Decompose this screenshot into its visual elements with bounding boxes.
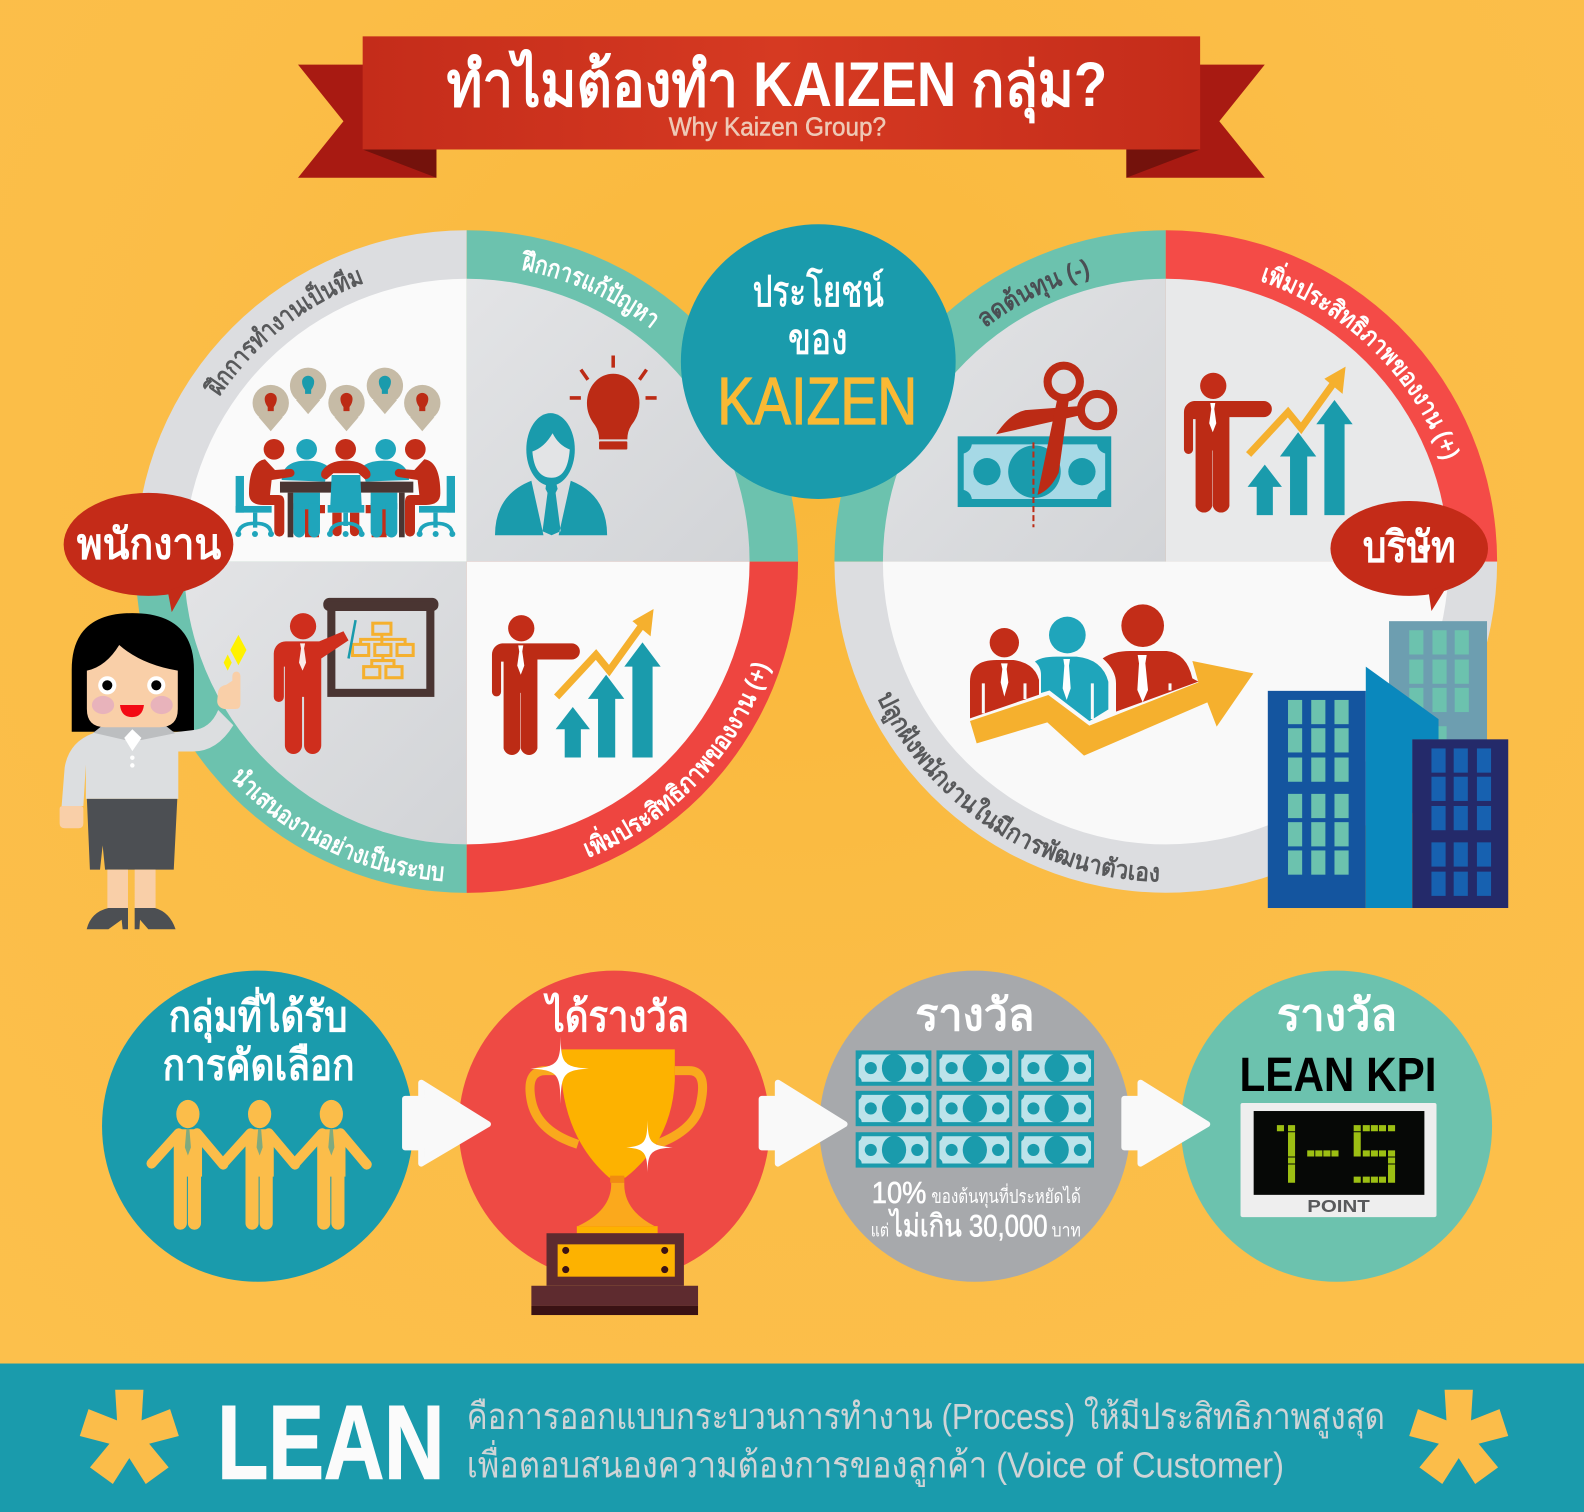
icon: office buildings: [1268, 621, 1508, 908]
ribbon tails: [298, 65, 1265, 178]
ring label: self development: ปลูกฝังพนักงานในมีการพัฒนาตัวเอง: [878, 692, 1159, 882]
icon: trophy: [530, 1036, 703, 1315]
definition text: เพื่อตอบสนองความต้องการของลูกค้า (Voice of Customer): [467, 1441, 1284, 1488]
icon: three people holding hands: [152, 1100, 367, 1230]
step heading: ได้รางวัล: [543, 992, 689, 1040]
ring label: teamwork: ฝึกการทำงานเป็นทีม: [203, 268, 364, 396]
arrow: step 3 to 4: [1124, 1083, 1207, 1164]
arrow: step 1 to 2: [405, 1083, 488, 1164]
step circle: LEAN KPI reward: [1181, 971, 1492, 1282]
shirt and arms: [62, 710, 233, 806]
icon: banknotes grid: [856, 1050, 1094, 1168]
icon: man pointing at rising chart: [1184, 367, 1353, 515]
step heading: [163, 986, 355, 1089]
speech bubble: company: [1330, 501, 1488, 611]
icon: man pointing at rising chart: [492, 609, 661, 758]
reward conditions: [871, 1177, 1081, 1243]
center circle: benefits of KAIZEN: [681, 224, 956, 499]
reward conditions: ไม่เกิน 30,000: [888, 1207, 1048, 1243]
scoreboard 1-5 point: [1241, 1103, 1437, 1217]
title: ทำไมต้องทำ KAIZEN กลุ่ม?: [447, 48, 1107, 123]
face: [87, 645, 178, 727]
eyes, cheeks and mouth: [92, 676, 173, 717]
LEAN wordmark: LEAN: [217, 1385, 444, 1502]
step heading: รางวัล: [915, 991, 1034, 1040]
icon: scissors cutting banknote: [958, 366, 1113, 527]
icon: right asterisk: [1409, 1390, 1508, 1484]
title banner: [298, 36, 1265, 178]
circle quadrants: [135, 230, 798, 893]
step circle: selected group: [102, 971, 413, 1282]
speech bubble: employee: พนักงาน: [77, 521, 221, 568]
subtitle: Why Kaizen Group?: [669, 111, 886, 141]
center heading line 2: ของ: [788, 316, 848, 363]
panel: employee benefits circle: [137, 230, 798, 893]
panel: company benefits circle: [834, 230, 1508, 908]
center heading KAIZEN: KAIZEN: [717, 365, 917, 439]
step heading: กลุ่มที่ได้รับ: [169, 986, 348, 1043]
speech bubble: employee: [64, 493, 233, 612]
reward conditions: ของต้นทุนที่ประหยัดได้: [931, 1183, 1081, 1209]
legs: [107, 870, 156, 908]
ring label: efficiency: เพิ่มประสิทธิภาพของงาน (+): [584, 663, 774, 858]
sparkle: [224, 635, 246, 671]
skirt: [87, 799, 177, 870]
shoes: [87, 908, 176, 929]
ring label: efficiency: เพิ่มประสิทธิภาพของงาน (+): [1262, 262, 1460, 460]
ring label: cost reduction: ลดต้นทุน (-): [978, 259, 1090, 326]
arrow: step 2 to 3: [762, 1083, 845, 1164]
icon: person with light bulb idea: [495, 356, 657, 535]
definition text: [467, 1396, 1385, 1488]
step circle: award: [459, 971, 770, 1315]
employee figure: [60, 613, 246, 929]
scoreboard 1-5 point: POINT: [1307, 1196, 1370, 1216]
reward conditions: บาท: [1052, 1220, 1081, 1240]
definition text: คือการออกแบบกระบวนการทำงาน (Process) ให้มีประสิทธิภาพสูงสุด: [467, 1396, 1385, 1439]
ring label: systematic presentation: นำเสนองานอย่างเป็นระบบ: [232, 769, 444, 882]
collar pin and buttons: [124, 729, 141, 768]
circle quadrants: [834, 230, 1497, 893]
step circle: cash reward: [819, 971, 1130, 1282]
hands: [60, 672, 240, 828]
LEAN KPI label: LEAN KPI: [1240, 1048, 1437, 1102]
step heading: รางวัล: [1277, 991, 1397, 1040]
icon: team meeting with ideas: [235, 368, 455, 537]
reward conditions: 10%: [872, 1177, 926, 1210]
icon: left asterisk: [80, 1390, 179, 1484]
ring label: problem solving: ฝึกการแก้ปัญหา: [522, 250, 658, 328]
banner body: [363, 36, 1200, 149]
collar: [93, 725, 175, 740]
center heading line 1: ประโยชน์: [753, 267, 884, 315]
speech bubble: company: บริษัท: [1363, 524, 1456, 571]
hair: [72, 613, 194, 732]
icon: presenter with flow chart: [274, 598, 438, 754]
step heading: การคัดเลือก: [163, 1042, 355, 1089]
footer band: LEAN definition: [0, 1364, 1584, 1512]
reward conditions: แต่: [871, 1220, 889, 1240]
icon: team on rising arrow: [970, 604, 1253, 756]
